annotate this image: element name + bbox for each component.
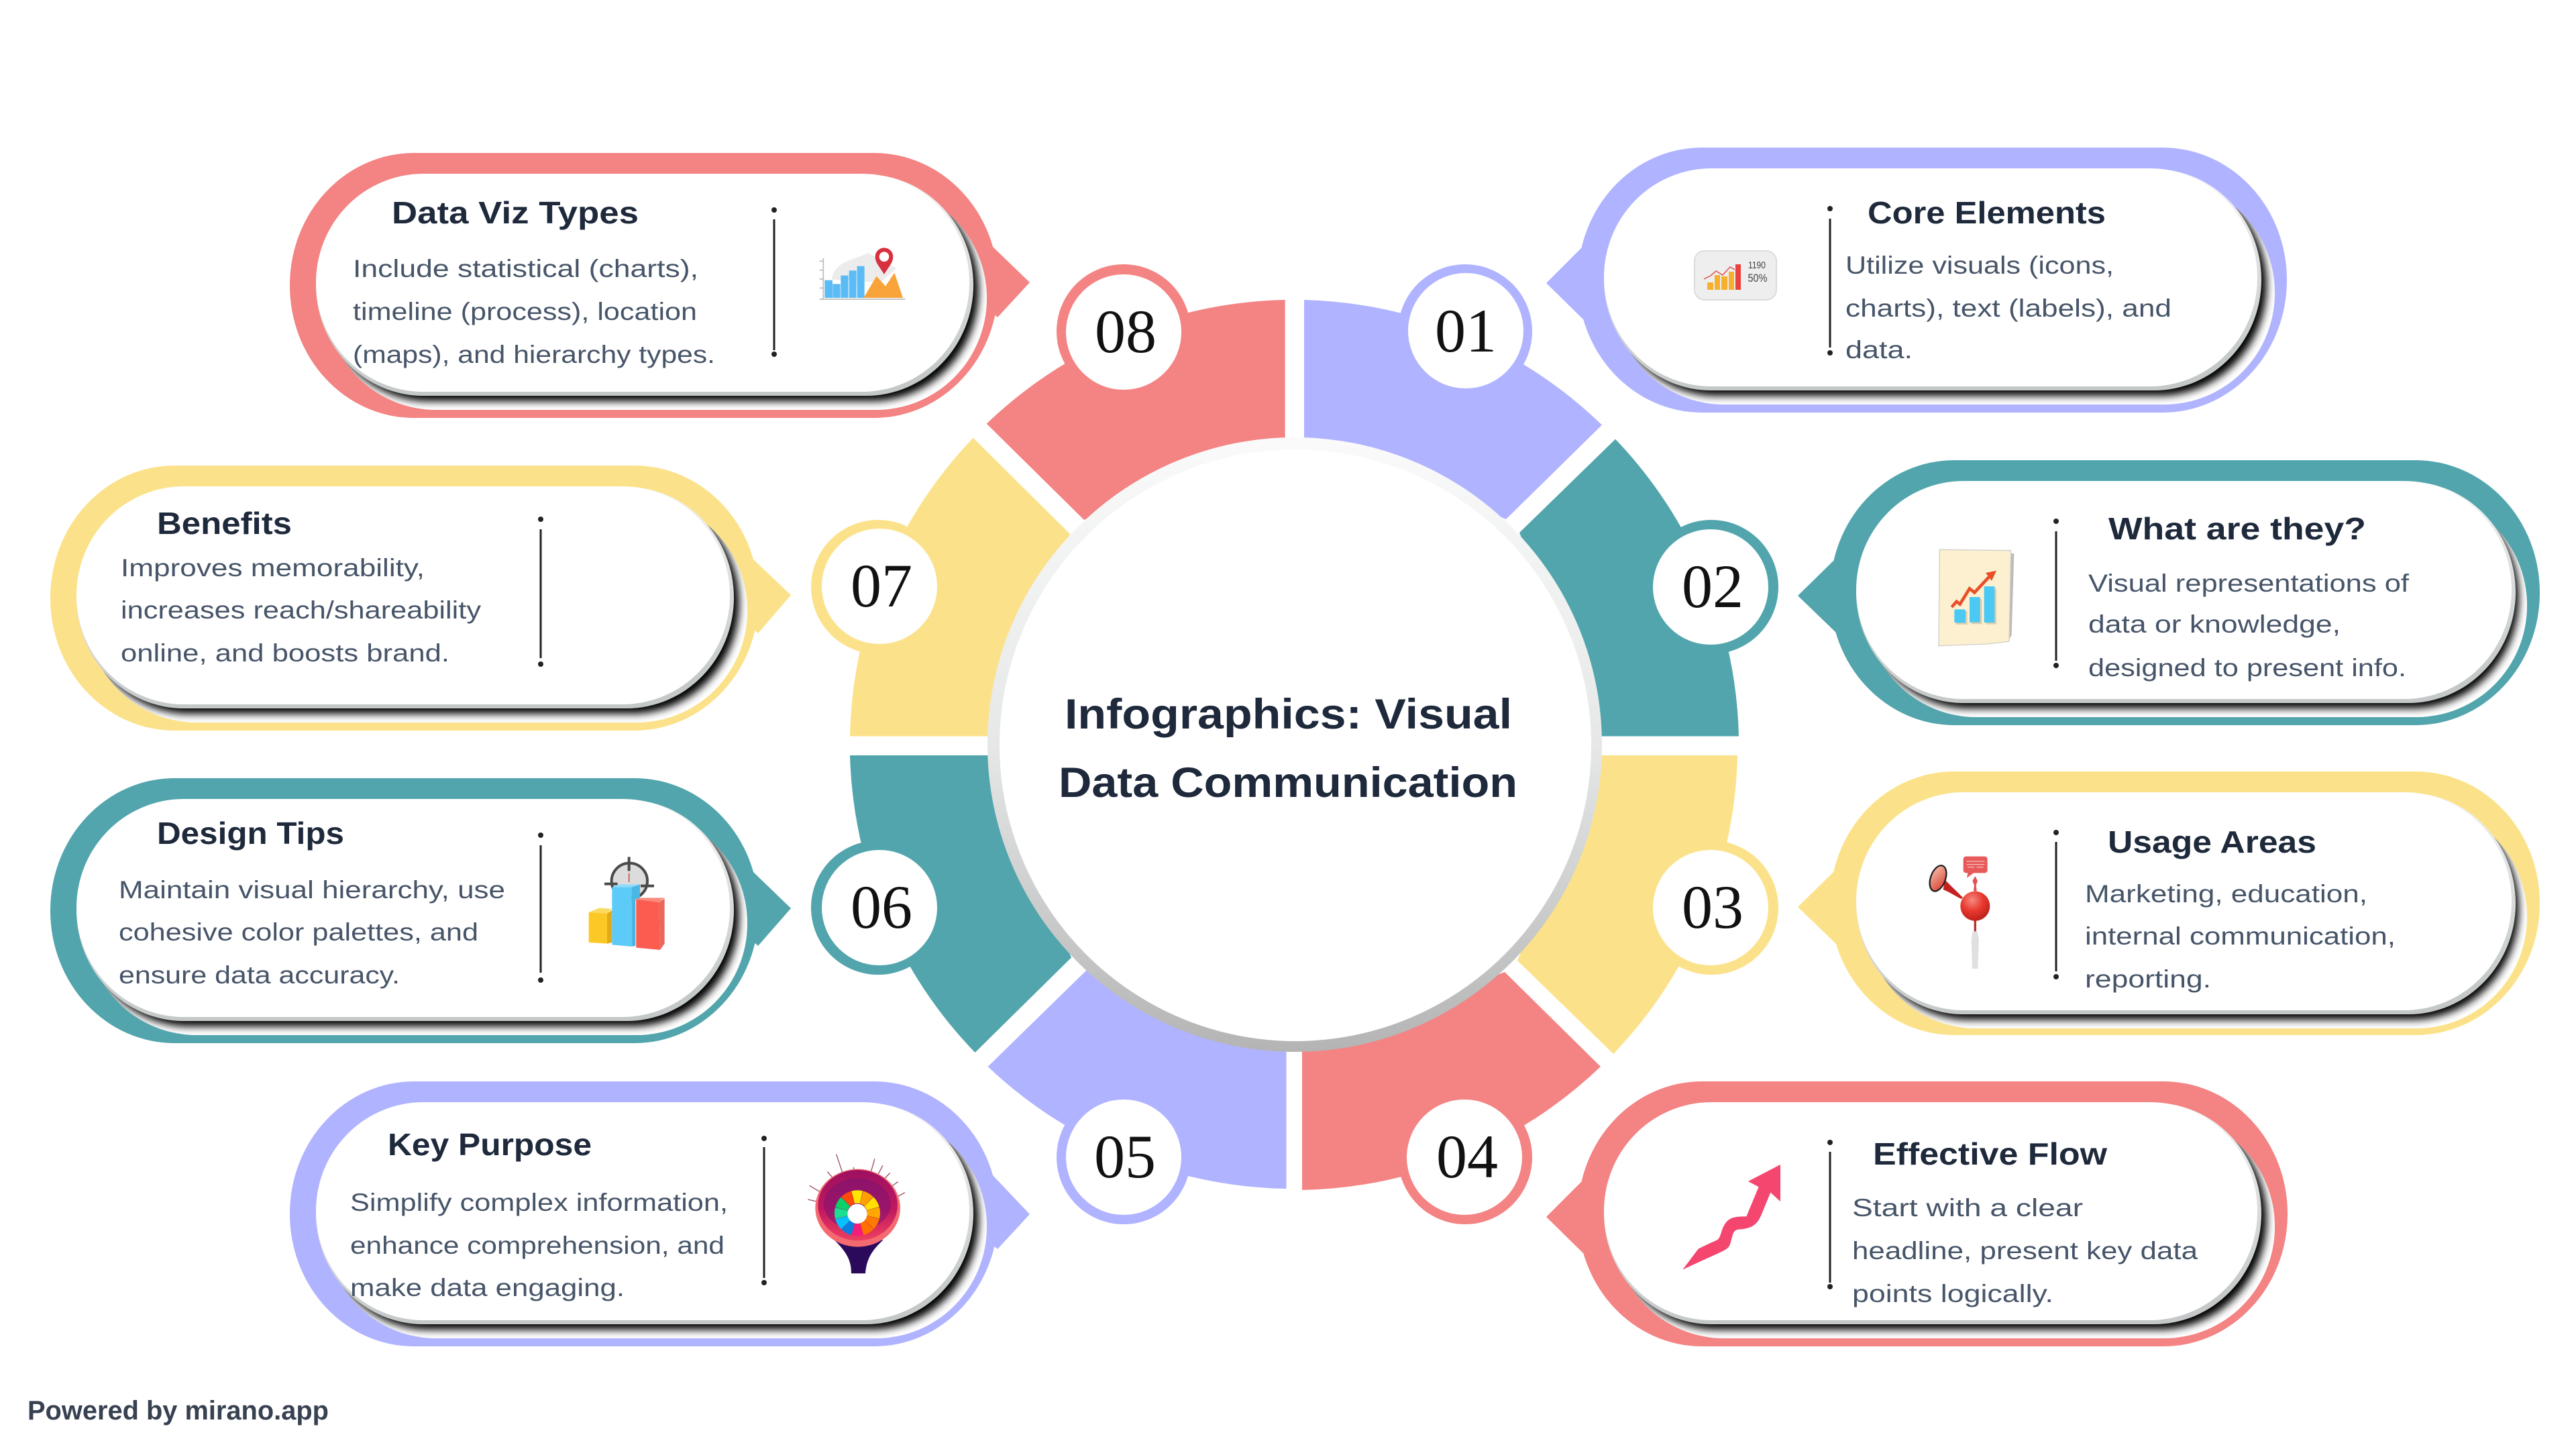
panel 01: Core Elements bbox=[1546, 148, 2287, 413]
body text: points logically. bbox=[1852, 1280, 2053, 1307]
card shape bbox=[50, 778, 791, 1043]
panel 08: Data Viz Types bbox=[290, 153, 1030, 418]
card shape bbox=[290, 153, 1030, 418]
divider bbox=[761, 1136, 767, 1285]
radial ring of eight segments bbox=[850, 300, 1739, 1190]
body text: ensure data accuracy. bbox=[119, 961, 400, 989]
heading: Core Elements bbox=[1868, 195, 2106, 230]
segment 02 bbox=[1519, 439, 1739, 737]
body text: Start with a clear bbox=[1852, 1194, 2083, 1222]
body text bbox=[1852, 1194, 2198, 1307]
body text bbox=[1845, 252, 2171, 364]
divider bbox=[1827, 1140, 1833, 1289]
card shape bbox=[1798, 771, 2540, 1035]
number badge 05 bbox=[1057, 1090, 1191, 1224]
segment 03 bbox=[1517, 755, 1737, 1054]
body text bbox=[2085, 880, 2396, 993]
divider bbox=[2053, 519, 2059, 668]
central circle with title bbox=[987, 437, 1602, 1052]
body text: (maps), and hierarchy types. bbox=[353, 341, 715, 368]
card shape bbox=[1798, 460, 2540, 725]
body text: Utilize visuals (icons, bbox=[1845, 252, 2114, 279]
number badge 02: 02 bbox=[1682, 552, 1743, 621]
body text: Maintain visual hierarchy, use bbox=[119, 876, 505, 904]
body text: data. bbox=[1845, 336, 1913, 364]
number badge 04: 04 bbox=[1436, 1122, 1498, 1191]
number badge 08 bbox=[1057, 264, 1191, 398]
body text: enhance comprehension, and bbox=[350, 1232, 724, 1259]
segment 01 bbox=[1304, 300, 1602, 519]
panel 07: Benefits bbox=[50, 466, 791, 731]
body text: increases reach/shareability bbox=[121, 596, 482, 624]
icon: bars with target bbox=[589, 857, 665, 950]
number badge 01: 01 bbox=[1435, 297, 1497, 365]
number badge 08: 08 bbox=[1095, 297, 1157, 366]
number badge 01 bbox=[1398, 264, 1532, 398]
number badge 07 bbox=[811, 520, 945, 654]
panel 05: Key Purpose bbox=[290, 1081, 1030, 1346]
number badge 02 bbox=[1644, 520, 1778, 654]
panel 06: Design Tips bbox=[50, 778, 791, 1043]
body text: internal communication, bbox=[2085, 922, 2396, 950]
body text: charts), text (labels), and bbox=[1845, 294, 2171, 322]
panel 03: Usage Areas bbox=[1798, 771, 2540, 1035]
number badge 07: 07 bbox=[851, 551, 912, 620]
footer credit: Powered by mirano.app bbox=[28, 1396, 329, 1426]
body text: reporting. bbox=[2085, 965, 2211, 993]
body text bbox=[2088, 570, 2410, 682]
heading: Effective Flow bbox=[1873, 1136, 2107, 1171]
title: Infographics: Visual bbox=[1065, 691, 1512, 738]
number badge 03: 03 bbox=[1682, 873, 1743, 941]
card shape bbox=[290, 1081, 1030, 1346]
heading: Key Purpose bbox=[388, 1127, 592, 1162]
body text: timeline (process), location bbox=[353, 298, 697, 325]
panel 04: Effective Flow bbox=[1546, 1081, 2288, 1346]
icon: chart card: 50% bbox=[1748, 272, 1767, 284]
body text: Improves memorability, bbox=[121, 554, 425, 582]
icon: chart card: 1190 bbox=[1748, 260, 1766, 271]
segment 08 bbox=[987, 300, 1285, 520]
number badge 05: 05 bbox=[1094, 1122, 1156, 1191]
heading: What are they? bbox=[2108, 511, 2366, 546]
card shape bbox=[50, 466, 791, 731]
body text: data or knowledge, bbox=[2088, 610, 2341, 638]
divider bbox=[538, 833, 543, 983]
heading: Design Tips bbox=[157, 816, 344, 851]
number badge 04 bbox=[1398, 1090, 1532, 1224]
divider bbox=[538, 517, 543, 667]
body text: Simplify complex information, bbox=[350, 1189, 728, 1216]
icon: megaphone and pin bbox=[1927, 857, 1990, 969]
icon: colour wheel funnel bbox=[808, 1155, 905, 1273]
icon: bar chart with map pin bbox=[820, 248, 905, 299]
panel 02: What are they? bbox=[1798, 460, 2540, 725]
segment 05 bbox=[988, 969, 1287, 1189]
body text bbox=[119, 876, 505, 989]
title: Data Communication bbox=[1059, 759, 1517, 806]
segment 04 bbox=[1302, 972, 1601, 1190]
body text: Include statistical (charts), bbox=[353, 255, 698, 282]
body text: make data engaging. bbox=[350, 1274, 625, 1301]
card shape bbox=[1546, 148, 2287, 413]
icon: wavy growth arrow bbox=[1682, 1165, 1780, 1270]
divider bbox=[1827, 206, 1833, 356]
body text bbox=[121, 554, 482, 667]
divider bbox=[771, 207, 777, 357]
body text: headline, present key data bbox=[1852, 1237, 2198, 1265]
body text bbox=[353, 255, 715, 368]
icon: paper with growth chart bbox=[1939, 549, 2014, 646]
icon: chart card bbox=[1695, 251, 1776, 300]
title bbox=[1059, 691, 1517, 806]
heading: Usage Areas bbox=[2108, 824, 2316, 859]
number badge 03 bbox=[1644, 841, 1778, 975]
segment 06 bbox=[850, 755, 1071, 1053]
body text bbox=[350, 1189, 728, 1301]
heading: Benefits bbox=[157, 506, 292, 541]
segment 07 bbox=[850, 438, 1070, 737]
divider bbox=[2053, 830, 2059, 979]
body text: designed to present info. bbox=[2088, 654, 2406, 682]
card shape bbox=[1546, 1081, 2288, 1346]
body text: online, and boosts brand. bbox=[121, 639, 449, 667]
number badge 06: 06 bbox=[851, 873, 912, 941]
heading: Data Viz Types bbox=[392, 195, 639, 230]
body text: cohesive color palettes, and bbox=[119, 918, 478, 946]
number badge 06 bbox=[811, 841, 945, 975]
body text: Visual representations of bbox=[2088, 570, 2410, 597]
body text: Marketing, education, bbox=[2085, 880, 2367, 908]
